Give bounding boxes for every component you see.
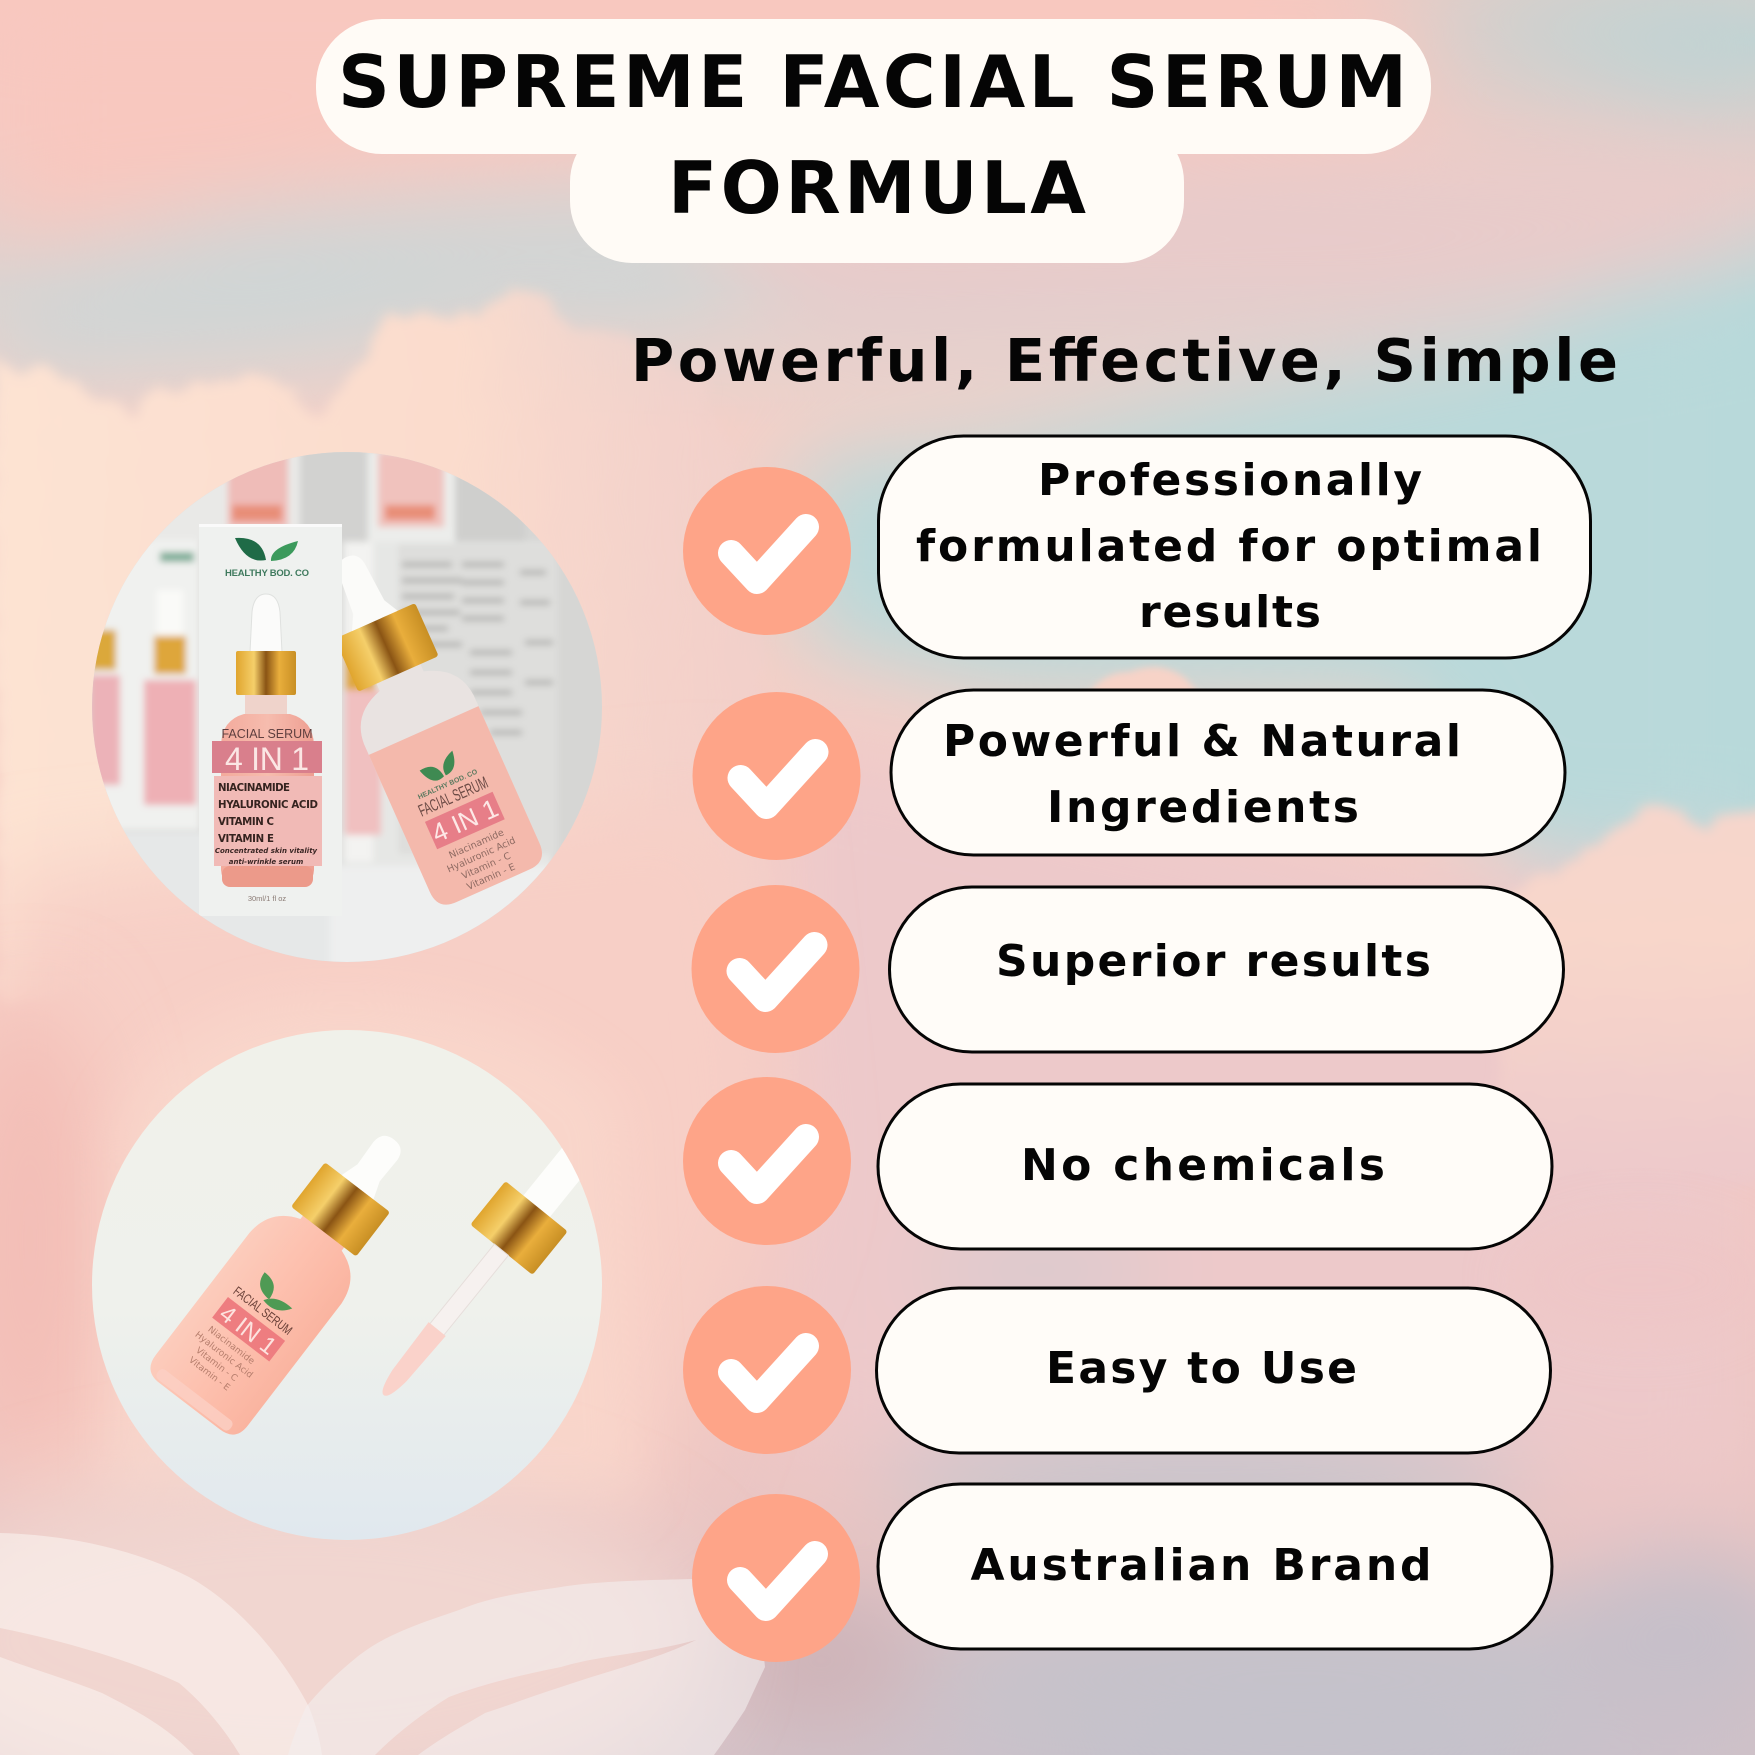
pill 4 text: No chemicals (1021, 1140, 1385, 1191)
title text line one: SUPREME FACIAL SERUM (338, 40, 1407, 124)
tilted bottle: Niacinamide (447, 827, 506, 861)
flat bottle: Vitamin - C (193, 1346, 239, 1384)
cloud: upper left peach (0, 287, 770, 1000)
pill 3 text: Superior results (996, 936, 1431, 987)
loose dropper (353, 1125, 613, 1420)
pill 5 text: Easy to Use (1046, 1343, 1357, 1394)
pill 2 text: Powerful & Natural (943, 716, 1461, 767)
flat bottle: Niacinamide (206, 1325, 256, 1367)
flat bottle: Vitamin - E (186, 1355, 232, 1393)
front product box: anti-wrinkle serum (229, 858, 303, 866)
title text line two: FORMULA (668, 146, 1086, 230)
product photo 1: box and tilted bottle (80, 440, 610, 976)
subheading: Powerful, Effective, Simple (631, 326, 1618, 395)
pill 6 (878, 1484, 1552, 1649)
flat bottle: Hyaluronic Acid (193, 1330, 254, 1381)
bottom left glow behind the leaves (0, 1470, 700, 1755)
tilted bottle: 4 IN 1 (427, 793, 503, 848)
pill 5 (876, 1288, 1550, 1453)
checklist (683, 436, 1590, 1662)
title pill: second line (570, 120, 1184, 263)
front product box: 4 IN 1 (225, 741, 309, 777)
front product box (199, 524, 342, 916)
item 6: australian brand (692, 1484, 1552, 1662)
pill 1 text: results (1139, 587, 1321, 638)
check badge 3 (692, 885, 860, 1053)
pill 1 text: formulated for optimal (916, 521, 1542, 572)
tilted bottle: Vitamin - E (465, 862, 517, 893)
item 1: professionally formulated (683, 436, 1590, 658)
flat bottle (144, 1104, 440, 1441)
shading below the left cloud (0, 800, 780, 1500)
product photo 2: flat lay bottle and dropper (90, 1028, 613, 1543)
tilted bottle logo (420, 750, 454, 781)
item 5: easy to use (683, 1286, 1550, 1454)
pill 1 text (916, 455, 1542, 638)
item 4: no chemicals (683, 1077, 1552, 1249)
front product box: VITAMIN E (218, 834, 274, 845)
front product box: HEALTHY BOD. CO (225, 568, 309, 579)
blurred background boxes (92, 452, 552, 962)
pill 3 (890, 887, 1564, 1052)
tilted bottle (342, 556, 542, 905)
tilted bottle: HEALTHY BOD. CO (417, 768, 479, 801)
front product box: HYALURONIC ACID (218, 800, 318, 811)
brand logo: green leaves (235, 538, 266, 561)
cloud: mid left lobes (110, 998, 640, 1500)
tilted bottle: FACIAL SERUM (415, 773, 491, 820)
pill 2 text (943, 716, 1461, 833)
front product box: VITAMIN C (218, 817, 274, 828)
check badge 1 (683, 467, 851, 635)
pill 2 text: Ingredients (1047, 782, 1359, 833)
check badge 2 (692, 692, 860, 860)
front product box: Concentrated skin vitality (215, 847, 318, 855)
item 3: superior results (692, 885, 1564, 1053)
flat bottle: 4 IN 1 (214, 1300, 281, 1361)
check badge 5 (683, 1286, 851, 1454)
box bottle (221, 594, 314, 887)
pill 1 (878, 436, 1590, 658)
pill 1 text: Professionally (1038, 455, 1422, 506)
pill 6 text: Australian Brand (970, 1540, 1432, 1591)
title banner (316, 19, 1431, 263)
pill 4 (878, 1084, 1552, 1249)
front product box: NIACINAMIDE (218, 783, 290, 794)
flat bottle: FACIAL SERUM (231, 1283, 295, 1338)
check badge 6 (692, 1494, 860, 1662)
ingredient panel (214, 776, 322, 866)
title pill: first line (316, 19, 1431, 154)
front product box: 30ml/1 fl oz (248, 894, 286, 903)
4 in 1 banner (212, 741, 322, 773)
check badge 4 (683, 1077, 851, 1245)
pill 2 (891, 690, 1565, 855)
tilted bottle: Hyaluronic Acid (445, 835, 517, 875)
cloud: small peach puff (1085, 667, 1205, 700)
cloud: pink patch right (1510, 1220, 1755, 1340)
flat bottle leaf logo (250, 1272, 300, 1318)
decorative leaf: bottom left (0, 1533, 765, 1755)
cloud: right peach (1500, 805, 1755, 1180)
front product box: FACIAL SERUM (222, 726, 312, 741)
item 2: powerful and natural (692, 690, 1565, 860)
tilted bottle: Vitamin - C (460, 850, 513, 882)
